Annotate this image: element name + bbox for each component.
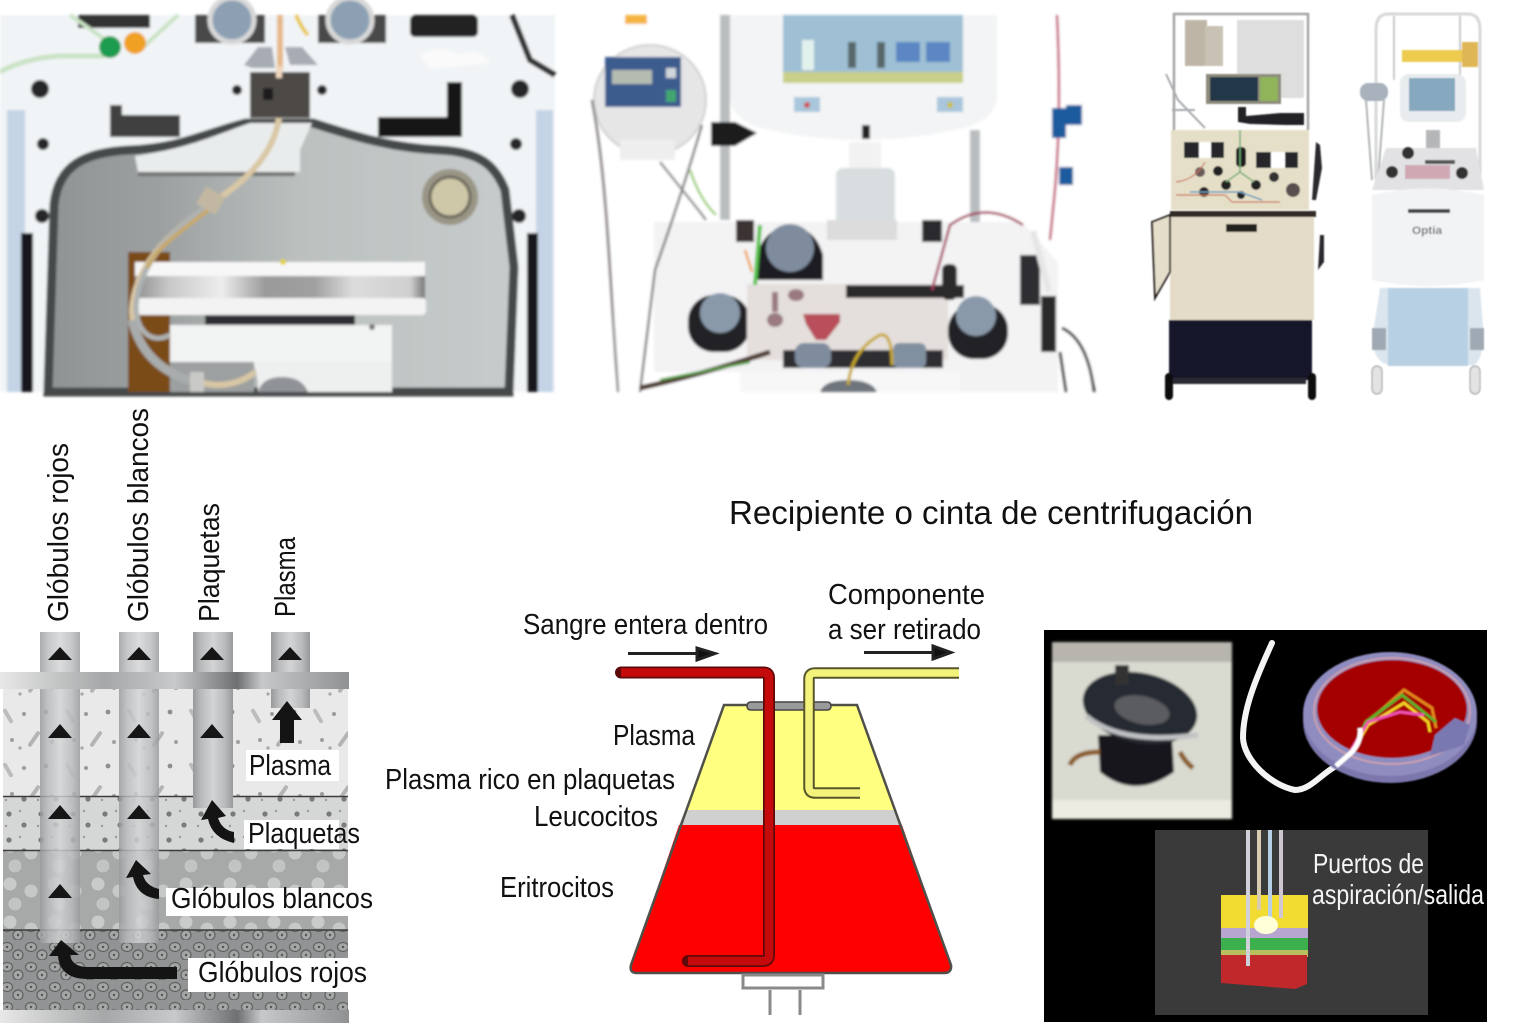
photo: centrifuge bowl xyxy=(1052,642,1232,819)
disc illustration xyxy=(1303,652,1477,783)
cavity with gasket xyxy=(48,123,514,392)
central clamp xyxy=(244,47,318,118)
vertical label: Plaquetas: Plaquetas xyxy=(194,503,226,622)
keypad xyxy=(1206,74,1281,104)
panel: separation layers diagram xyxy=(0,632,373,1023)
yellow outlet tube xyxy=(809,673,959,793)
label: Puertos de aspiración/salida: aspiración/salida xyxy=(1312,879,1484,910)
pump heads xyxy=(688,220,1008,359)
lower black base xyxy=(1165,320,1316,400)
yellow fluid bag xyxy=(1402,50,1476,62)
cassette xyxy=(747,264,964,368)
clamp xyxy=(711,122,757,146)
bowl foot xyxy=(743,975,823,1015)
side holder xyxy=(1020,230,1056,352)
cabinet xyxy=(1152,211,1316,320)
side tubes xyxy=(1366,100,1384,180)
disc xyxy=(135,259,426,325)
bowl bands xyxy=(685,705,896,810)
blue lower body xyxy=(1372,288,1484,394)
white tube xyxy=(1243,643,1336,790)
neck and deck xyxy=(1372,130,1484,190)
diagram: centrifuge bowl xyxy=(621,672,959,1015)
title: Recipiente o cinta de centrifugación xyxy=(729,494,1253,531)
pole frame xyxy=(1174,14,1308,210)
arrow: inflow xyxy=(628,648,715,660)
white body: Optia xyxy=(1412,225,1443,237)
label: Plasma rico en plaquetas: Plasma rico en plaquetas xyxy=(385,764,675,796)
vertical label: Glóbulos rojos: Glóbulos rojos xyxy=(43,443,75,622)
arm xyxy=(1238,107,1304,125)
pump unit xyxy=(594,45,706,160)
arrow: red cells xyxy=(49,940,177,979)
bottle xyxy=(836,125,895,228)
white body xyxy=(1372,188,1484,286)
top equipment xyxy=(0,0,555,75)
label: Componente a ser retirado xyxy=(828,579,985,646)
monitor xyxy=(1400,74,1466,122)
handset xyxy=(1312,142,1324,270)
bowl cap xyxy=(747,702,831,710)
label: Glóbulos blancos: Glóbulos blancos xyxy=(171,883,373,915)
bowl outline xyxy=(631,705,951,973)
wires xyxy=(1166,74,1205,128)
label: Plaquetas: Plaquetas xyxy=(248,818,360,850)
panel: apheresis device close-up xyxy=(592,15,1095,392)
panel: centrifuge chamber photo xyxy=(0,0,555,392)
lines xyxy=(592,15,1094,392)
label: Sangre entera dentro: Sangre entera dentro xyxy=(523,609,768,641)
label: Plasma: Plasma xyxy=(613,720,696,752)
arrow: outflow xyxy=(864,646,951,659)
slots xyxy=(110,105,180,137)
layers xyxy=(3,689,348,1010)
arrow: plasma xyxy=(272,701,302,743)
label: Plasma: Plasma xyxy=(249,750,332,782)
deck xyxy=(654,222,1058,392)
side strips xyxy=(7,110,25,392)
label: Puertos de aspiración/salida xyxy=(1312,848,1484,910)
tubing xyxy=(132,118,279,392)
layered column graphic xyxy=(1155,830,1428,1015)
control panel xyxy=(1171,130,1309,210)
blue clips xyxy=(1052,105,1082,185)
upper white recess xyxy=(135,123,312,172)
vertical label: Plasma: Plasma xyxy=(270,536,302,617)
small pump xyxy=(1360,83,1388,101)
screws xyxy=(31,80,529,223)
label: Leucocitos: Leucocitos xyxy=(534,801,658,833)
arrow: platelets xyxy=(201,800,234,843)
fluid bags xyxy=(1185,20,1304,98)
label: Glóbulos rojos: Glóbulos rojos xyxy=(198,957,367,989)
collection tubes xyxy=(40,632,310,943)
panel: white apheresis machine xyxy=(1360,14,1484,394)
label: Puertos de aspiración/salida: Puertos de xyxy=(1313,848,1424,879)
monitor xyxy=(730,15,997,140)
brown strip xyxy=(128,252,170,392)
poles xyxy=(720,15,730,220)
label: Componente a ser retirado: Componente xyxy=(828,579,985,611)
arrow: white cells xyxy=(126,860,159,899)
vertical label: Glóbulos blancos: Glóbulos blancos xyxy=(123,408,155,622)
label: Componente a ser retirado: a ser retirado xyxy=(828,614,981,646)
panel: aspiration ports xyxy=(1044,630,1487,1022)
panel: beige apheresis machine xyxy=(1152,14,1324,400)
sight window xyxy=(422,169,478,225)
base xyxy=(170,324,392,392)
plasma tube lower part xyxy=(271,689,310,708)
flow triangles xyxy=(48,647,302,898)
label: Eritrocitos: Eritrocitos xyxy=(500,872,614,904)
top and bottom bars xyxy=(0,672,349,689)
bottom knob xyxy=(820,380,877,392)
red inlet tube xyxy=(621,672,769,961)
